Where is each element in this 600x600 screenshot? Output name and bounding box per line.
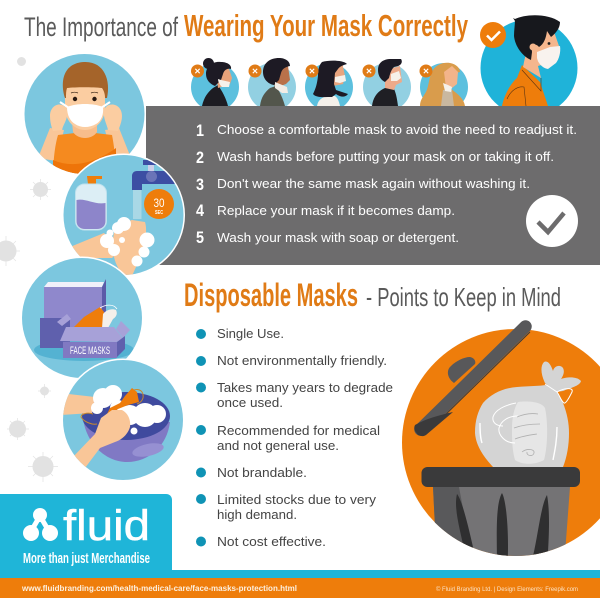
icon: tied bag with mask [475,362,581,467]
bullet list: points to keep in mind: Not brandable. [217,465,307,480]
bullet list: points to keep in mind: Single Use. [217,326,284,341]
numbered instructions: 1 [196,121,204,140]
bullet list: points to keep in mind: Not environmentally friendly. [217,353,387,368]
circle: washing hands [62,154,185,276]
small profile: mask on chin [248,58,296,111]
bullet list: points to keep in mind [196,326,393,549]
small profile: mask below nose [305,61,353,111]
bullet list: points to keep in mind: Limited stocks due to very [217,492,376,507]
numbered instructions: 2 [196,148,204,167]
circle: washing a mask in a bowl [60,358,184,482]
heading: disposable masks: Disposable Masks [184,277,358,313]
icon: bin rim [422,467,580,487]
small profile: mask on mouth only [362,59,411,111]
small profile: blonde with mask on neck [420,63,468,111]
soapy hands [70,217,154,276]
numbered instructions: 5 [196,228,204,247]
icon: check mark [526,195,578,247]
circle: box of face masks [20,256,144,380]
icon: faucet and water [132,160,175,219]
icon: bin lid [414,326,530,436]
numbered instructions: 4 [196,201,204,220]
decorative virus particles [0,58,58,482]
numbered instructions: Don't wear the same mask again without washing it. [217,176,530,191]
bullet list: points to keep in mind: Recommended for medical [217,423,380,438]
numbered instructions: Wash your mask with soap or detergent. [217,230,459,245]
numbered instructions: Replace your mask if it becomes damp. [217,203,455,218]
icon: 30 sec timer: 30 [154,196,165,210]
circle: boy putting on mask [24,53,146,180]
logo panel: fluid [0,494,172,572]
panel: do's list [146,106,600,265]
logo panel: fluid: fluid [63,502,150,550]
numbered instructions: Wash hands before putting your mask on or taking it off. [217,149,554,164]
numbered instructions [196,121,577,247]
logo panel: fluid: More than just Merchandise [23,550,150,567]
numbered instructions: 3 [196,175,204,194]
bullet list: points to keep in mind: Takes many years to degrade [217,380,393,395]
bullet list: points to keep in mind: Not cost effective. [217,534,326,549]
footer bar: www.fluidbranding.com/health-medical-care/face-masks-protection.html [21,584,297,593]
bullet list: points to keep in mind: and not general use. [217,438,339,453]
circle: box of face masks: FACE MASKS [70,345,110,357]
icon: soap bottle [76,176,106,230]
footer bar [0,578,600,598]
footer cyan strip [0,570,600,578]
numbered instructions: Choose a comfortable mask to avoid the need to readjust it. [217,122,577,137]
bullet list: points to keep in mind: once used. [217,395,283,410]
small profile: mask under chin [191,58,239,111]
icon: fluid molecule [23,508,58,541]
title: The Importance of [24,12,178,42]
footer bar: © Fluid Branding Ltd. | Design Elements: Freepik.com [436,586,578,593]
icon: 30 sec timer [144,189,174,219]
circle: mask in trash bin [402,326,600,567]
title [24,8,468,43]
icon: bin body [433,487,570,556]
bullet list: points to keep in mind: high demand. [217,507,297,522]
icon: 30 sec timer: SEC [155,210,163,216]
large profile: correct mask [480,15,578,117]
